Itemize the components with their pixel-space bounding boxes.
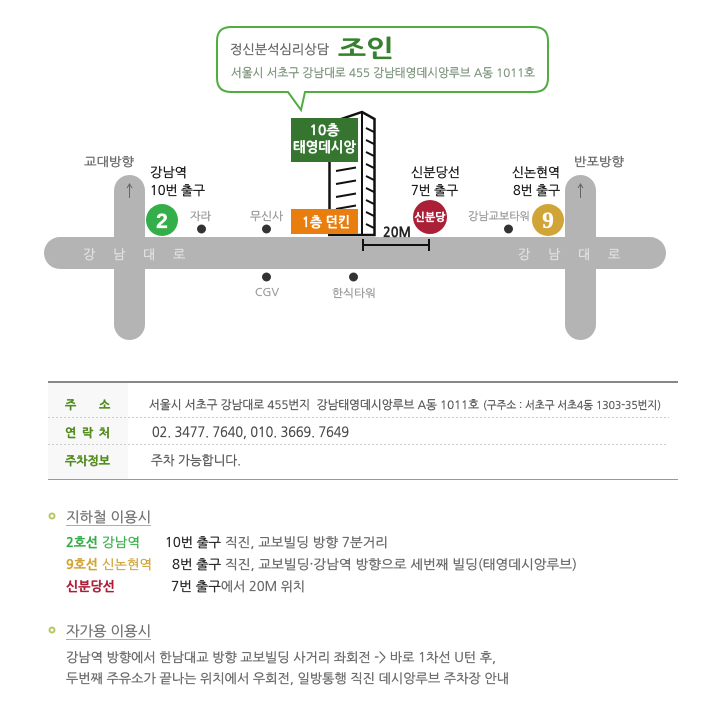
label: 10th floor: 10층 bbox=[309, 123, 340, 138]
speech bubble header bbox=[217, 27, 548, 110]
road name left: 대 bbox=[143, 248, 155, 261]
station: Sinnonhyeon exit 8: 8번 출구 bbox=[513, 184, 560, 197]
landmark: Zara bbox=[190, 210, 212, 234]
station: Sinnonhyeon exit 8: 신논현역 bbox=[512, 166, 560, 179]
line 2 directions: 2호선 bbox=[66, 536, 98, 549]
road name left: 강 bbox=[83, 248, 95, 261]
driving directions: 강남역 방향에서 한남대교 방향 교보빌딩 사거리 좌회전 -> 바로 1차선 U턴 후, bbox=[66, 651, 496, 664]
label: 1st floor Dunkin: 1층 던킨 bbox=[302, 215, 350, 230]
landmark: CGV: CGV bbox=[255, 287, 280, 298]
Sinbundang line directions: 에서 20M 위치 bbox=[221, 580, 305, 593]
row: parking: 주차 가능합니다. bbox=[151, 454, 241, 467]
road name left: 로 bbox=[173, 248, 185, 261]
row: contact bbox=[65, 426, 349, 440]
landmark: CGV bbox=[255, 272, 280, 298]
station: Gangnam exit 10: 강남역 bbox=[150, 166, 187, 179]
line 9 directions: 직진, 교보빌딩·강남역 방향으로 세번째 빌딩(태영데시앙루브) bbox=[225, 558, 577, 571]
Sinbundang line directions: 신분당선 bbox=[66, 580, 115, 593]
bubble subtitle: 정신분석심리상담 bbox=[230, 43, 329, 56]
bullet bbox=[50, 514, 54, 518]
direction label left: 교대방향 bbox=[84, 156, 135, 168]
road name right: 로 bbox=[608, 248, 620, 261]
landmark: Hansik Tower bbox=[332, 272, 376, 299]
line 2 directions bbox=[66, 536, 388, 549]
road name right: 남 bbox=[548, 248, 560, 261]
road name left bbox=[83, 248, 185, 261]
roads bbox=[44, 175, 666, 340]
station: Gangnam exit 10: 10번 출구 bbox=[150, 184, 205, 197]
section: by car bbox=[50, 624, 509, 685]
section heading: 자가용 이용시 bbox=[66, 624, 151, 639]
landmark: Zara: 자라 bbox=[190, 210, 212, 222]
distance marker 20M: 20M bbox=[383, 226, 411, 240]
building bbox=[328, 112, 375, 235]
row: contact: 02. 3477. 7640, 010. 3669. 7649 bbox=[152, 426, 349, 440]
line 9 directions: 신논현역 bbox=[102, 558, 152, 571]
station: Gangnam exit 10 bbox=[146, 166, 205, 236]
row: parking bbox=[65, 454, 241, 467]
station: Gangnam exit 10: 2 bbox=[156, 210, 168, 233]
bullet bbox=[50, 628, 54, 632]
landmark: Gangnam Kyobo Tower bbox=[468, 210, 530, 234]
arrow: towards Seoul Nat'l Univ of Education bbox=[127, 184, 132, 198]
station: Sinbundang exit 7 bbox=[411, 166, 460, 234]
station: Sinnonhyeon exit 8 bbox=[512, 166, 564, 236]
row: address: (구주소 : 서초구 서초4동 1303-35번지) bbox=[483, 399, 661, 411]
info table bbox=[48, 381, 678, 480]
arrow: towards Banpo bbox=[578, 184, 583, 198]
direction label right: 반포방향 bbox=[574, 156, 625, 168]
landmark: Gangnam Kyobo Tower: 강남교보타워 bbox=[468, 210, 530, 222]
landmark: Musinsa: 무신사 bbox=[250, 210, 284, 222]
line 9 directions bbox=[66, 558, 577, 571]
driving directions bbox=[66, 651, 509, 685]
row: address bbox=[65, 398, 661, 411]
line 2 directions: 10번 출구 bbox=[165, 536, 221, 549]
row: parking: 주차정보 bbox=[65, 454, 111, 467]
station: Sinbundang exit 7: 신분당 bbox=[414, 211, 446, 223]
Sinbundang line directions bbox=[66, 580, 305, 593]
row: address: 주 bbox=[65, 399, 77, 411]
driving directions: 두번째 주유소가 끝나는 위치에서 우회전, 일방통행 직진 데시앙루브 주차장 안내 bbox=[66, 672, 509, 685]
section heading: 지하철 이용시 bbox=[66, 510, 151, 525]
label: 1st floor Dunkin bbox=[291, 209, 358, 234]
road name right bbox=[518, 248, 620, 261]
bubble outline bbox=[217, 27, 548, 110]
station: Sinnonhyeon exit 8: 9 bbox=[542, 208, 554, 233]
label: 10th floor: 태영데시앙 bbox=[293, 140, 357, 155]
row: contact: 연 락 처 bbox=[65, 426, 110, 439]
label: 10th floor bbox=[291, 118, 358, 162]
landmark: Hansik Tower: 한식타워 bbox=[332, 287, 376, 299]
road map bbox=[44, 112, 666, 340]
line 2 directions: 직진, 교보빌딩 방향 7분거리 bbox=[225, 536, 388, 549]
distance marker 20M bbox=[363, 226, 429, 251]
section: by subway bbox=[50, 510, 577, 593]
Sinbundang line directions: 7번 출구 bbox=[171, 580, 221, 593]
line 9 directions: 8번 출구 bbox=[172, 558, 221, 571]
row: address: 소 bbox=[99, 399, 111, 411]
bubble address: 서울시 서초구 강남대로 455 강남태영데시앙루브 A동 1011호 bbox=[231, 66, 535, 79]
road name left: 남 bbox=[113, 248, 125, 261]
station: Sinbundang exit 7: 신분당선 bbox=[411, 166, 460, 179]
line 9 directions: 9호선 bbox=[66, 558, 98, 571]
road name right: 강 bbox=[518, 248, 530, 261]
road name right: 대 bbox=[578, 248, 590, 261]
landmark: Musinsa bbox=[250, 210, 284, 234]
station: Sinbundang exit 7: 7번 출구 bbox=[411, 184, 458, 197]
bubble logo: 조인 bbox=[338, 36, 394, 61]
row: address: 서울시 서초구 강남대로 455번지 강남태영데시앙루브 A동 1011호 bbox=[149, 398, 479, 411]
line 2 directions: 강남역 bbox=[102, 536, 140, 549]
